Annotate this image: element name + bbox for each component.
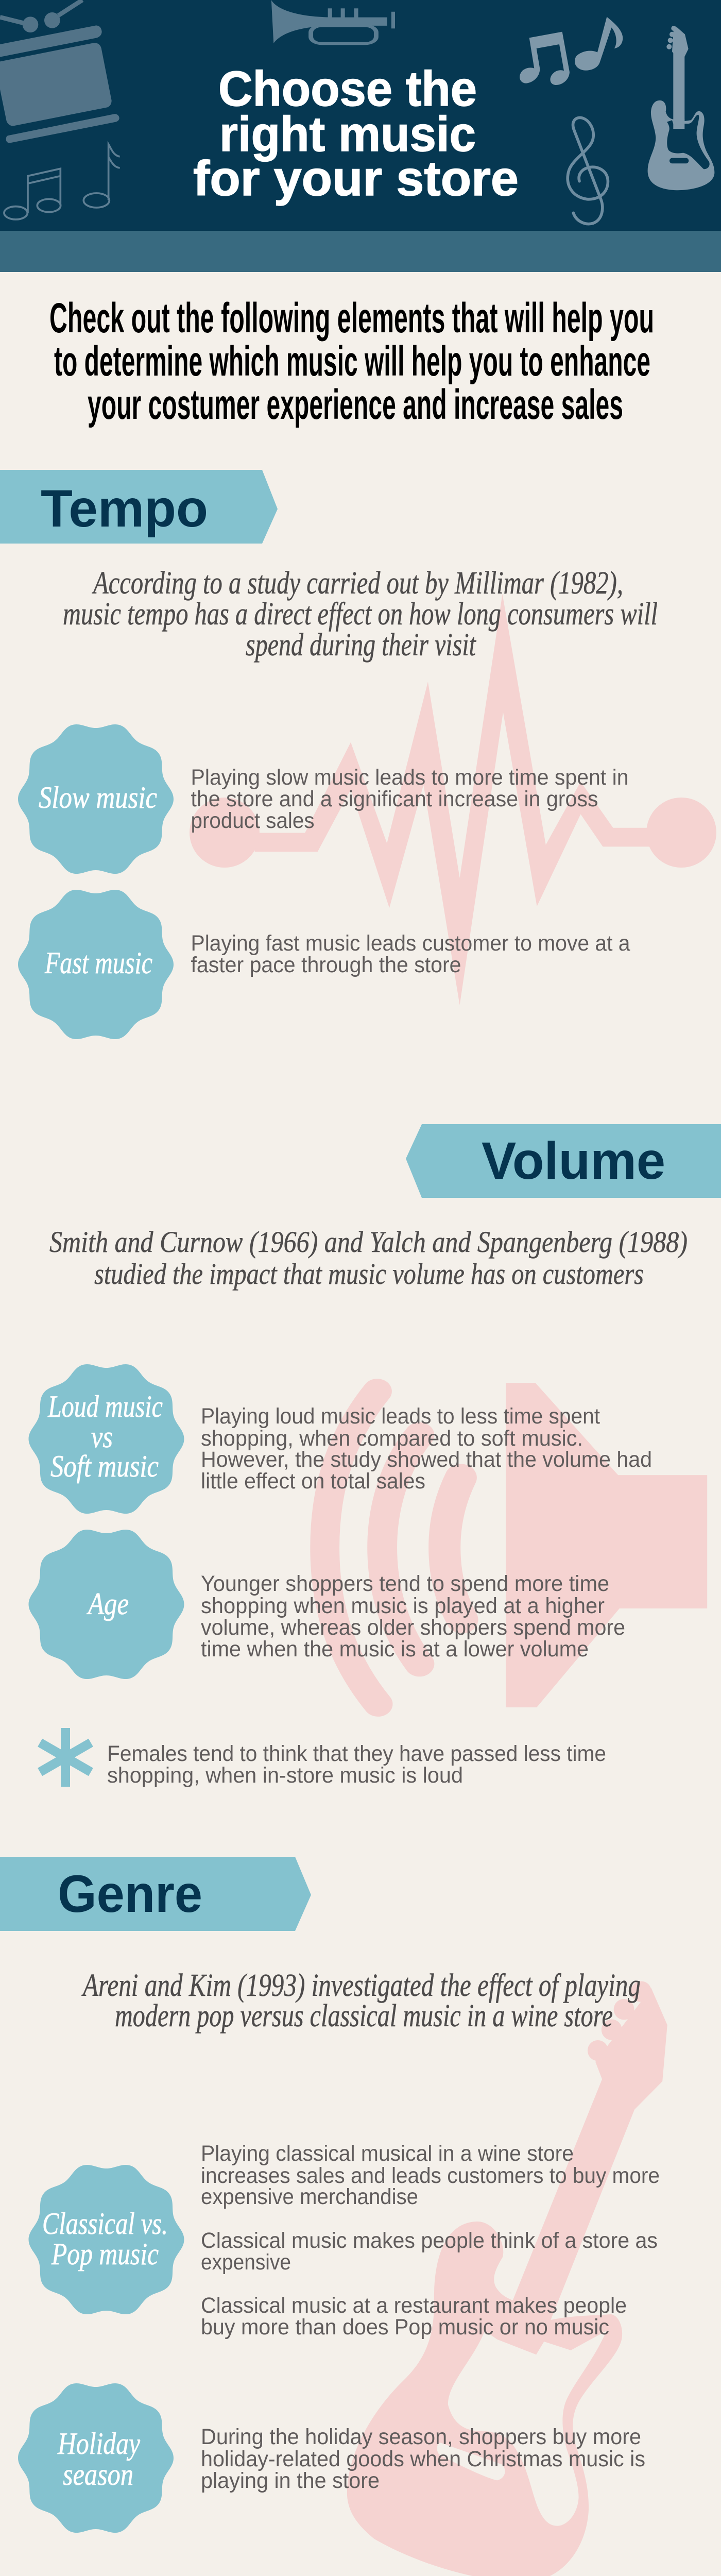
text: classical music effects: expensive merchandise [201,2184,418,2209]
icon: drum [0,0,119,143]
study text: tempo: spend during their visit [246,628,476,663]
callout: females [107,1741,606,1788]
title [193,61,519,206]
badge: loud vs soft music [29,1364,184,1514]
icon: electric guitar [648,26,714,190]
text: age effect: Younger shoppers tend to spend more time [201,1571,609,1596]
study text: genre [81,1968,641,2033]
text: slow music effect: product sales [191,808,314,833]
heading banner: Tempo [0,470,278,544]
text: age effect: shopping when music is played at a higher [201,1594,605,1618]
badge: classical vs pop music: Classical vs. [42,2207,168,2241]
heading banner: Genre [0,1857,311,1931]
icon: asterisk [38,1728,93,1787]
text: classical music effects: buy more than does Pop music or no music [201,2315,609,2340]
intro text [49,295,654,428]
text: fast music effect [191,931,630,977]
text: fast music effect: Playing fast music leads customer to move at a [191,931,630,956]
title: for your store [193,151,519,206]
text: loud music effect: shopping, when compared to soft music. [201,1426,583,1451]
badge: holiday season [18,2383,174,2533]
badge: classical vs pop music [29,2165,184,2314]
icon: treble clef [568,117,608,224]
badge: loud vs soft music: Loud music [47,1389,163,1423]
badge: slow music: Slow music [39,781,157,815]
text: age effect: volume, whereas older shoppers spend more [201,1615,625,1640]
text: age effect [201,1571,625,1662]
badge: fast music: Fast music [44,946,152,980]
badge: holiday season: season [63,2458,133,2492]
text: slow music effect [191,765,628,833]
text: loud music effect [201,1404,652,1494]
text: classical music effects: increases sales and leads customers to buy more [201,2163,660,2188]
heading banner: Volume [406,1124,721,1198]
badge: classical vs pop music: Pop music [51,2237,159,2271]
icon: heartbeat line [190,594,716,1005]
text: classical music effects: Classical music at a restaurant makes people [201,2293,627,2318]
icon: solid music notes [520,17,623,85]
panel: tempo [0,470,716,1039]
panel: header [0,0,721,272]
text: fast music effect: faster pace through the store [191,953,461,977]
badge: fast music [18,890,174,1039]
badge: slow music [18,724,174,874]
badge: loud vs soft music: Soft music [50,1449,159,1483]
heading banner: Tempo: Tempo [41,479,208,538]
text: classical music effects: expensive [201,2250,291,2275]
text: holiday season effect: During the holiday season, shoppers buy more [201,2425,641,2449]
text: classical music effects: Classical music makes people think of a store as [201,2228,658,2253]
icon: trumpet [271,0,395,44]
icon: outlined music notes [4,144,120,219]
text: classical music effects [201,2141,660,2340]
badge: loud vs soft music: vs [91,1420,113,1454]
badge: age [29,1530,184,1679]
badge: age: Age [87,1587,129,1621]
study text: tempo [63,566,658,663]
text: slow music effect: Playing slow music leads to more time spent in [191,765,628,790]
heading banner: Genre: Genre [58,1865,202,1923]
heading banner: Volume: Volume [482,1131,665,1190]
study text: volume [49,1225,688,1291]
text: loud music effect: little effect on total sales [201,1469,425,1494]
text: slow music effect: the store and a significant increase in gross [191,787,598,811]
panel: volume [29,1124,721,1788]
icon: large guitar [347,1981,667,2576]
callout: females: Females tend to think that they have passed less time [107,1741,606,1766]
text: age effect: time when the music is at a lower volume [201,1637,589,1662]
panel: genre [0,1857,676,2576]
text: loud music effect: Playing loud music leads to less time spent [201,1404,600,1429]
title: Choose the [218,61,477,116]
text: holiday season effect: holiday-related goods when Christmas music is [201,2447,645,2471]
text: classical music effects: Playing classical musical in a wine store [201,2141,574,2166]
callout: females: shopping, when in-store music is loud [107,1763,463,1788]
title: right music [219,107,476,162]
badge: holiday season: Holiday [57,2427,140,2461]
text: holiday season effect [201,2425,645,2493]
text: holiday season effect: playing in the store [201,2468,380,2493]
text: loud music effect: However, the study showed that the volume had [201,1447,652,1472]
icon: speaker [325,1383,707,1707]
